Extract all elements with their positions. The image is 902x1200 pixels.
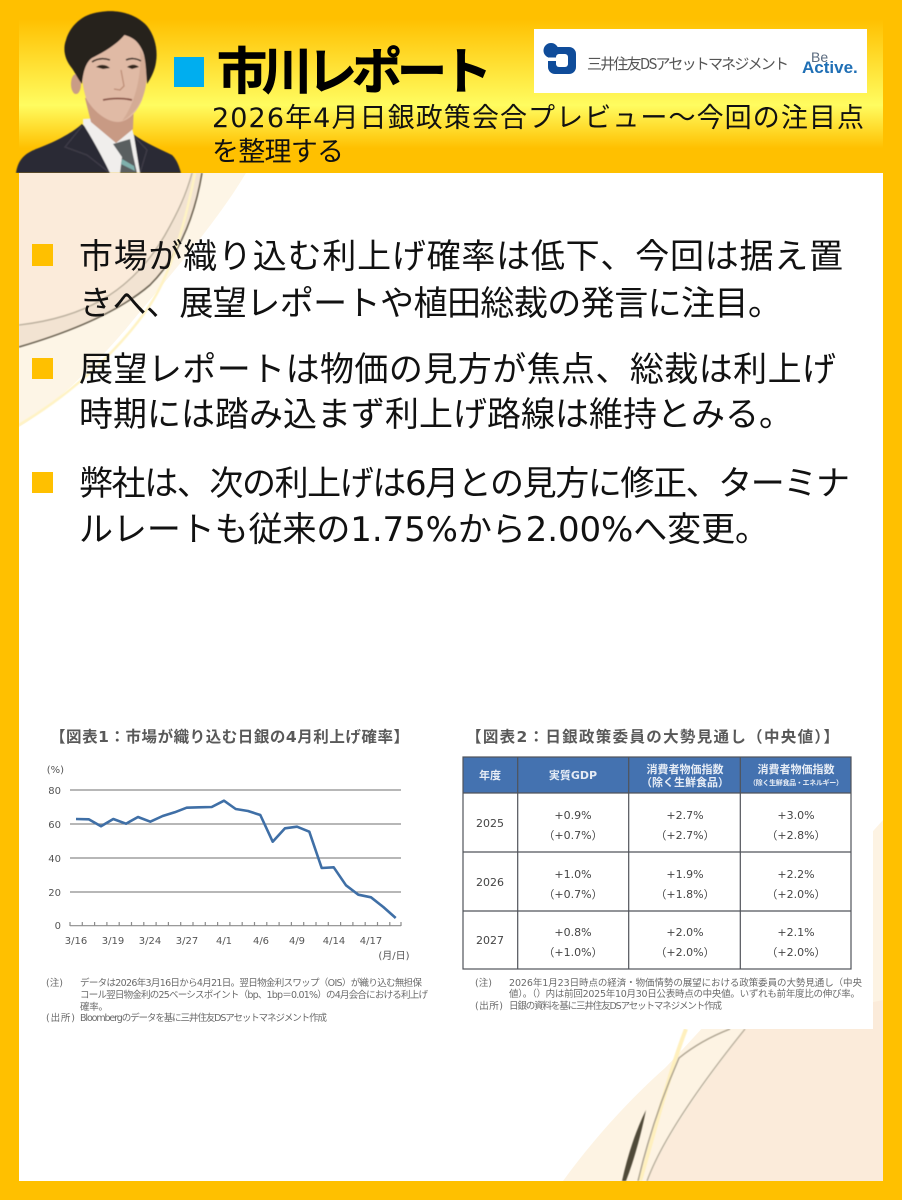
row 2025: （+2.8%） — [766, 829, 826, 842]
icon: company mark — [544, 43, 576, 74]
table header labels: （除く生鮮食品・エネルギー） — [749, 778, 843, 787]
portrait: back hair — [124, 32, 136, 41]
chart 2 notes — [475, 977, 862, 1012]
bullet point 2: 時期には踏み込まず利上げ路線は維持とみる。 — [79, 395, 793, 435]
portrait: tie — [113, 139, 137, 173]
row 2025: +3.0% — [777, 809, 815, 822]
portrait: face — [82, 33, 148, 122]
x axis labels: 3/19 — [102, 936, 124, 947]
table header labels: （除く生鮮食品） — [641, 775, 729, 789]
bullet point 1: 市場が織り込む利上げ確率は低下、今回は据え置 — [79, 237, 843, 277]
chart 1 notes: コール翌日物金利の25ベーシスポイント（bp、1bp＝0.01%）の4月会合における利上げ — [80, 989, 428, 1001]
chart 1 notes: 確率。 — [80, 1001, 108, 1013]
bullet point 3: ルレートも従来の1.75%から2.00%へ変更。 — [79, 510, 769, 550]
portrait: nose — [114, 70, 124, 90]
portrait: lapels — [65, 126, 147, 173]
row 2027: （+2.0%） — [766, 946, 826, 959]
decoration: bottom-right corner swoosh — [563, 820, 883, 1181]
chart 2 notes: (注) — [475, 977, 492, 989]
chart 2 heading: 【図表2：日銀政策委員の大勢見通し（中央値）】 — [466, 727, 839, 746]
row 2025: （+0.7%） — [543, 829, 603, 842]
row 2026 — [476, 868, 826, 901]
y axis labels: (%) — [47, 765, 64, 776]
x axis labels: 4/1 — [216, 936, 232, 947]
logo slogan — [802, 49, 858, 77]
outlook table — [463, 757, 851, 969]
table header labels: 実質GDP — [549, 768, 597, 782]
chart 1 notes: データは2026年3月16日から4月21日。翌日物金利スワップ（OIS）が織り込む無担保 — [80, 977, 422, 989]
row 2025 — [476, 809, 826, 842]
table header row — [463, 757, 851, 793]
row 2025: +2.7% — [666, 809, 704, 822]
table header labels: 消費者物価指数 — [758, 762, 834, 776]
panel: chart 2 white backing — [456, 722, 873, 1029]
data line: April hike probability — [76, 801, 396, 918]
x axis labels: 4/6 — [253, 936, 269, 947]
chart 1 notes: (注) — [46, 977, 63, 989]
bullet point 1: きへ、展望レポートや植田総裁の発言に注目。 — [79, 284, 782, 324]
subtitle: を整理する — [212, 137, 344, 168]
row 2026: 2026 — [476, 876, 504, 889]
y axis labels — [47, 765, 64, 932]
bullet point 1 — [32, 237, 843, 324]
row 2026: （+2.0%） — [766, 888, 826, 901]
title: 市川レポート — [217, 32, 492, 104]
row 2027: 2027 — [476, 934, 504, 947]
x axis labels: 4/14 — [323, 936, 345, 947]
y axis labels: 40 — [48, 854, 61, 865]
decoration: top-left corner swoosh — [19, 173, 246, 427]
chart 2 notes: 日銀の資料を基に三井住友DSアセットマネジメント作成 — [509, 1000, 722, 1012]
bullet point 2 — [32, 350, 836, 435]
subtitle — [212, 103, 864, 168]
chart 2 notes: 値）。（）内は前回2025年10月30日公表時点の中央値。いずれも前年度比の伸び率。 — [509, 988, 860, 1000]
row 2026: （+0.7%） — [543, 888, 603, 901]
portrait photo illustration — [16, 11, 181, 173]
chart 2 notes: 2026年1月23日時点の経済・物価情勢の展望における政策委員の大勢見通し（中央 — [509, 977, 862, 989]
y axis labels: 80 — [48, 786, 61, 797]
chart 1 heading: 【図表1：市場が織り込む日銀の4月利上げ確率】 — [50, 727, 409, 746]
row 2026: +1.9% — [666, 868, 704, 881]
panel: chart 2 — [463, 727, 862, 1012]
icon: blue title square — [174, 57, 204, 87]
x axis labels: 3/24 — [139, 936, 161, 947]
y axis labels: 20 — [48, 888, 61, 899]
bullet point 3: 弊社は、次の利上げは6月との見方に修正、ターミナ — [79, 464, 850, 504]
portrait: shirt — [83, 118, 140, 173]
subtitle: 2026年4月日銀政策会合プレビュー～今回の注目点 — [212, 103, 864, 134]
logo slogan: Active. — [802, 58, 858, 77]
row 2027: +0.8% — [554, 926, 592, 939]
table header labels: 消費者物価指数 — [646, 762, 724, 776]
header band — [19, 19, 883, 173]
chart 1 notes: Bloombergのデータを基に三井住友DSアセットマネジメント作成 — [80, 1012, 327, 1024]
row 2027: （+2.0%） — [655, 946, 715, 959]
table header labels — [479, 762, 843, 789]
y axis labels: 0 — [55, 921, 61, 932]
row 2027: +2.1% — [777, 926, 815, 939]
row 2027: +2.0% — [666, 926, 704, 939]
row 2026: +1.0% — [554, 868, 592, 881]
x axis labels: (月/日) — [378, 950, 410, 962]
row 2025: +0.9% — [554, 809, 592, 822]
portrait: hair — [64, 11, 157, 84]
x axis labels: 4/9 — [289, 936, 305, 947]
table header labels: 年度 — [479, 768, 501, 782]
company logo — [534, 29, 867, 93]
portrait: mouth — [103, 98, 132, 100]
line chart — [47, 765, 410, 962]
x axis labels: 4/17 — [360, 936, 382, 947]
x axis labels: 3/16 — [65, 936, 87, 947]
panel: chart 1 — [46, 727, 428, 1024]
logo wordmark: 三井住友DSアセットマネジメント — [587, 53, 789, 74]
chart 2 notes: (出所) — [475, 1000, 503, 1012]
x axis labels: 3/27 — [176, 936, 198, 947]
row 2026: +2.2% — [777, 868, 815, 881]
portrait: neck — [85, 98, 134, 143]
row 2027 — [476, 926, 826, 959]
chart 1 notes: (出所) — [46, 1012, 75, 1024]
row 2025: （+2.7%） — [655, 829, 715, 842]
bullet point 2: 展望レポートは物価の見方が焦点、総裁は利上げ — [79, 350, 836, 390]
portrait: suit jacket — [16, 124, 181, 173]
logo slogan: Be — [811, 49, 828, 65]
row 2025: 2025 — [476, 817, 504, 830]
portrait: brows and eyes — [92, 59, 141, 62]
row 2027: （+1.0%） — [543, 946, 603, 959]
bullet point 3 — [32, 464, 850, 550]
x axis labels — [65, 936, 410, 962]
y axis labels: 60 — [48, 820, 61, 831]
row 2026: （+1.8%） — [655, 888, 715, 901]
portrait: ear — [71, 74, 81, 94]
chart 1 notes — [46, 977, 428, 1024]
